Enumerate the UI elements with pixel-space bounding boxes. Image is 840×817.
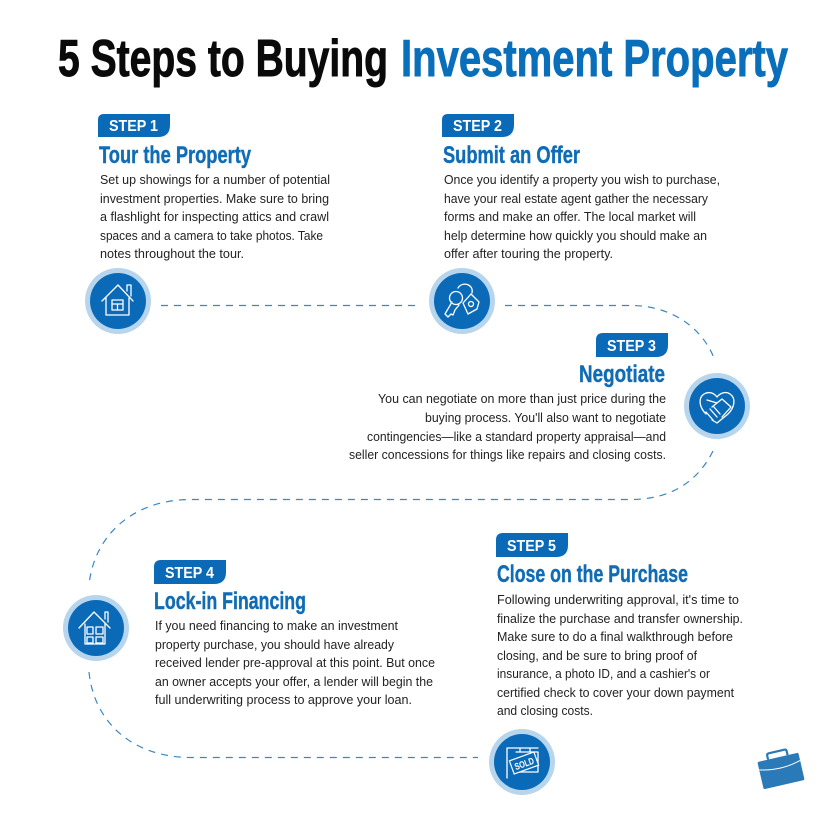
step 2 heading: Submit an Offer	[443, 142, 580, 169]
step 3 badge	[596, 333, 668, 357]
step 2 body text: Once you identify a property you wish to purchase,	[444, 173, 720, 187]
step 1 badge: STEP 1	[109, 118, 158, 135]
icon: house calculator	[63, 595, 129, 661]
panel: step 1	[98, 114, 330, 261]
step 2 body text: help determine how quickly you should make an	[444, 229, 707, 243]
icon: sold sign	[489, 729, 555, 795]
panel: step 2	[442, 114, 720, 261]
step 5 heading: Close on the Purchase	[497, 561, 688, 588]
step 1 badge	[98, 114, 170, 137]
step 5 body text: certified check to cover your down payment	[497, 686, 734, 700]
step 5 body text: Make sure to do a final walkthrough before	[497, 630, 733, 644]
step 4 body text: an owner accepts your offer, a lender will begin the	[155, 675, 433, 689]
step 4 badge	[154, 560, 226, 584]
step 1 body text: notes throughout the tour.	[100, 247, 244, 261]
icon: sold sign: SOLD	[513, 756, 536, 773]
step 4 body text: If you need financing to make an investment	[155, 619, 398, 633]
step 4 body text	[155, 619, 435, 707]
step 1 body text: investment properties. Make sure to bring	[100, 192, 329, 206]
step 3 body text: contingencies—like a standard property appraisal—and	[367, 430, 666, 444]
step 1 heading: Tour the Property	[99, 142, 251, 169]
step 4 badge: STEP 4	[165, 565, 214, 582]
dashed connector path	[89, 306, 714, 758]
step 3 body text: You can negotiate on more than just price during the	[378, 392, 666, 406]
step 5 body text: Following underwriting approval, it's time to	[497, 593, 739, 607]
title: 5 Steps to Buying	[58, 30, 388, 88]
step 3 body text: buying process. You'll also want to negotiate	[425, 411, 666, 425]
step 3 heading: Negotiate	[579, 361, 665, 388]
step 5 badge	[496, 533, 568, 557]
step 1 body text: spaces and a camera to take photos. Take	[100, 229, 323, 243]
step 2 badge: STEP 2	[453, 118, 502, 135]
icon: keys with house tag	[429, 268, 495, 334]
step 5 body text: and closing costs.	[497, 704, 593, 718]
step 2 body text	[444, 173, 720, 261]
step 3 badge: STEP 3	[607, 338, 656, 355]
step 3 body text	[349, 392, 666, 462]
step 2 badge	[442, 114, 514, 137]
icon: handshake heart	[684, 373, 750, 439]
title	[58, 30, 788, 88]
step 1 body text: a flashlight for inspecting attics and crawl	[100, 210, 329, 224]
panel: step 4	[154, 560, 435, 707]
step 4 body text: full underwriting process to approve your loan.	[155, 693, 412, 707]
step 5 body text: finalize the purchase and transfer ownership.	[497, 612, 743, 626]
step 4 heading: Lock-in Financing	[154, 588, 306, 615]
panel: step 5	[496, 533, 743, 718]
step 3 body text: seller concessions for things like repairs and closing costs.	[349, 448, 666, 462]
panel: step 3	[349, 333, 668, 462]
step 4 body text: property purchase, you should have already	[155, 638, 395, 652]
step 5 body text	[497, 593, 743, 718]
step 1 body text	[100, 173, 330, 261]
icon: briefcase	[756, 747, 805, 789]
icon: house	[85, 268, 151, 334]
step 5 body text: insurance, a photo ID, and a cashier's or	[497, 667, 710, 681]
step 5 body text: closing, and be sure to bring proof of	[497, 649, 697, 663]
step 2 body text: forms and make an offer. The local market will	[444, 210, 696, 224]
step 2 body text: have your real estate agent gather the necessary	[444, 192, 709, 206]
step 1 body text: Set up showings for a number of potential	[100, 173, 330, 187]
step 4 body text: received lender pre-approval at this point. But once	[155, 656, 435, 670]
step 5 badge: STEP 5	[507, 538, 556, 555]
step 2 body text: offer after touring the property.	[444, 247, 613, 261]
